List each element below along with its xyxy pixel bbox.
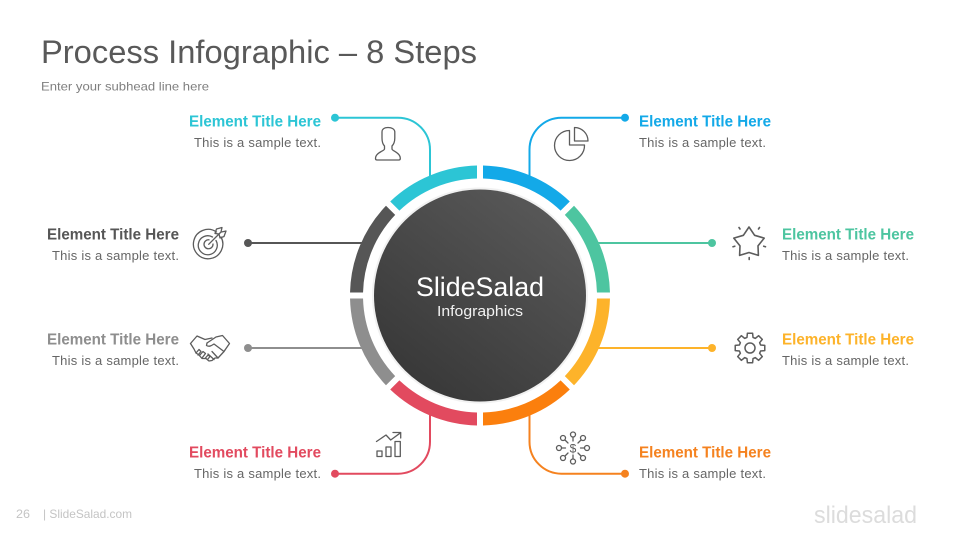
subhead: Enter your subhead line here bbox=[41, 80, 209, 94]
title: Process Infographic – 8 Steps bbox=[41, 34, 477, 70]
step: lower left gray bbox=[47, 332, 362, 368]
sample text: This is a sample text. bbox=[639, 135, 766, 150]
segment: gray bbox=[350, 298, 395, 385]
segment: orange bbox=[483, 380, 570, 425]
sample text: This is a sample text. bbox=[782, 248, 909, 263]
element title: Element Title Here bbox=[47, 226, 179, 244]
dot bbox=[331, 470, 339, 478]
step: top left teal bbox=[189, 114, 430, 178]
element title: Element Title Here bbox=[189, 444, 321, 462]
step: bottom right orange bbox=[530, 412, 771, 481]
center heading: SlideSalad bbox=[416, 272, 544, 302]
segment: red bbox=[390, 380, 477, 425]
dot bbox=[708, 239, 716, 247]
connector bbox=[598, 242, 712, 244]
icon: target bbox=[193, 228, 226, 259]
icon: money network: $ bbox=[570, 442, 577, 456]
connector bbox=[335, 118, 430, 178]
segment: yellow bbox=[565, 298, 610, 385]
icon: pie chart bbox=[555, 128, 588, 161]
step: mid left dark bbox=[47, 226, 362, 263]
segment: blue bbox=[483, 166, 570, 211]
connector bbox=[335, 412, 430, 474]
element title: Element Title Here bbox=[639, 114, 771, 130]
dot bbox=[708, 344, 716, 352]
footer logo: slidesalad bbox=[814, 502, 917, 529]
sample text: This is a sample text. bbox=[782, 353, 909, 368]
dot bbox=[244, 239, 252, 247]
connector bbox=[598, 347, 712, 349]
step: mid right green bbox=[598, 226, 914, 263]
icon: star bbox=[733, 227, 766, 260]
step: top right blue bbox=[530, 114, 771, 178]
element title: Element Title Here bbox=[782, 332, 914, 348]
icon: handshake bbox=[190, 336, 230, 361]
sample text: This is a sample text. bbox=[639, 466, 766, 481]
center circle bbox=[372, 188, 588, 404]
connector bbox=[248, 242, 362, 244]
sample text: This is a sample text. bbox=[194, 135, 321, 150]
icon: person bbox=[376, 128, 400, 160]
footer page number: 26 bbox=[16, 507, 30, 521]
connector bbox=[530, 118, 625, 178]
sample text: This is a sample text. bbox=[52, 353, 179, 368]
step: bottom left red bbox=[189, 412, 430, 481]
segment: green bbox=[565, 206, 610, 292]
element title: Element Title Here bbox=[189, 114, 321, 130]
icon: growth chart bbox=[376, 432, 401, 456]
dot bbox=[621, 114, 629, 122]
step: lower right yellow bbox=[598, 332, 914, 368]
icon: money network bbox=[556, 432, 590, 464]
dot bbox=[621, 470, 629, 478]
element title: Element Title Here bbox=[639, 444, 771, 462]
connector bbox=[248, 347, 362, 349]
sample text: This is a sample text. bbox=[52, 248, 179, 263]
central ring bbox=[350, 166, 610, 425]
footer site link: | SlideSalad.com bbox=[43, 507, 132, 521]
dot bbox=[244, 344, 252, 352]
element title: Element Title Here bbox=[782, 226, 914, 244]
element title: Element Title Here bbox=[47, 332, 179, 348]
connector bbox=[530, 412, 625, 474]
center subheading: Infographics bbox=[437, 303, 523, 320]
segment: teal bbox=[390, 166, 477, 211]
segment: dark bbox=[350, 206, 395, 292]
icon: gear bbox=[735, 333, 765, 363]
sample text: This is a sample text. bbox=[194, 466, 321, 481]
dot bbox=[331, 114, 339, 122]
